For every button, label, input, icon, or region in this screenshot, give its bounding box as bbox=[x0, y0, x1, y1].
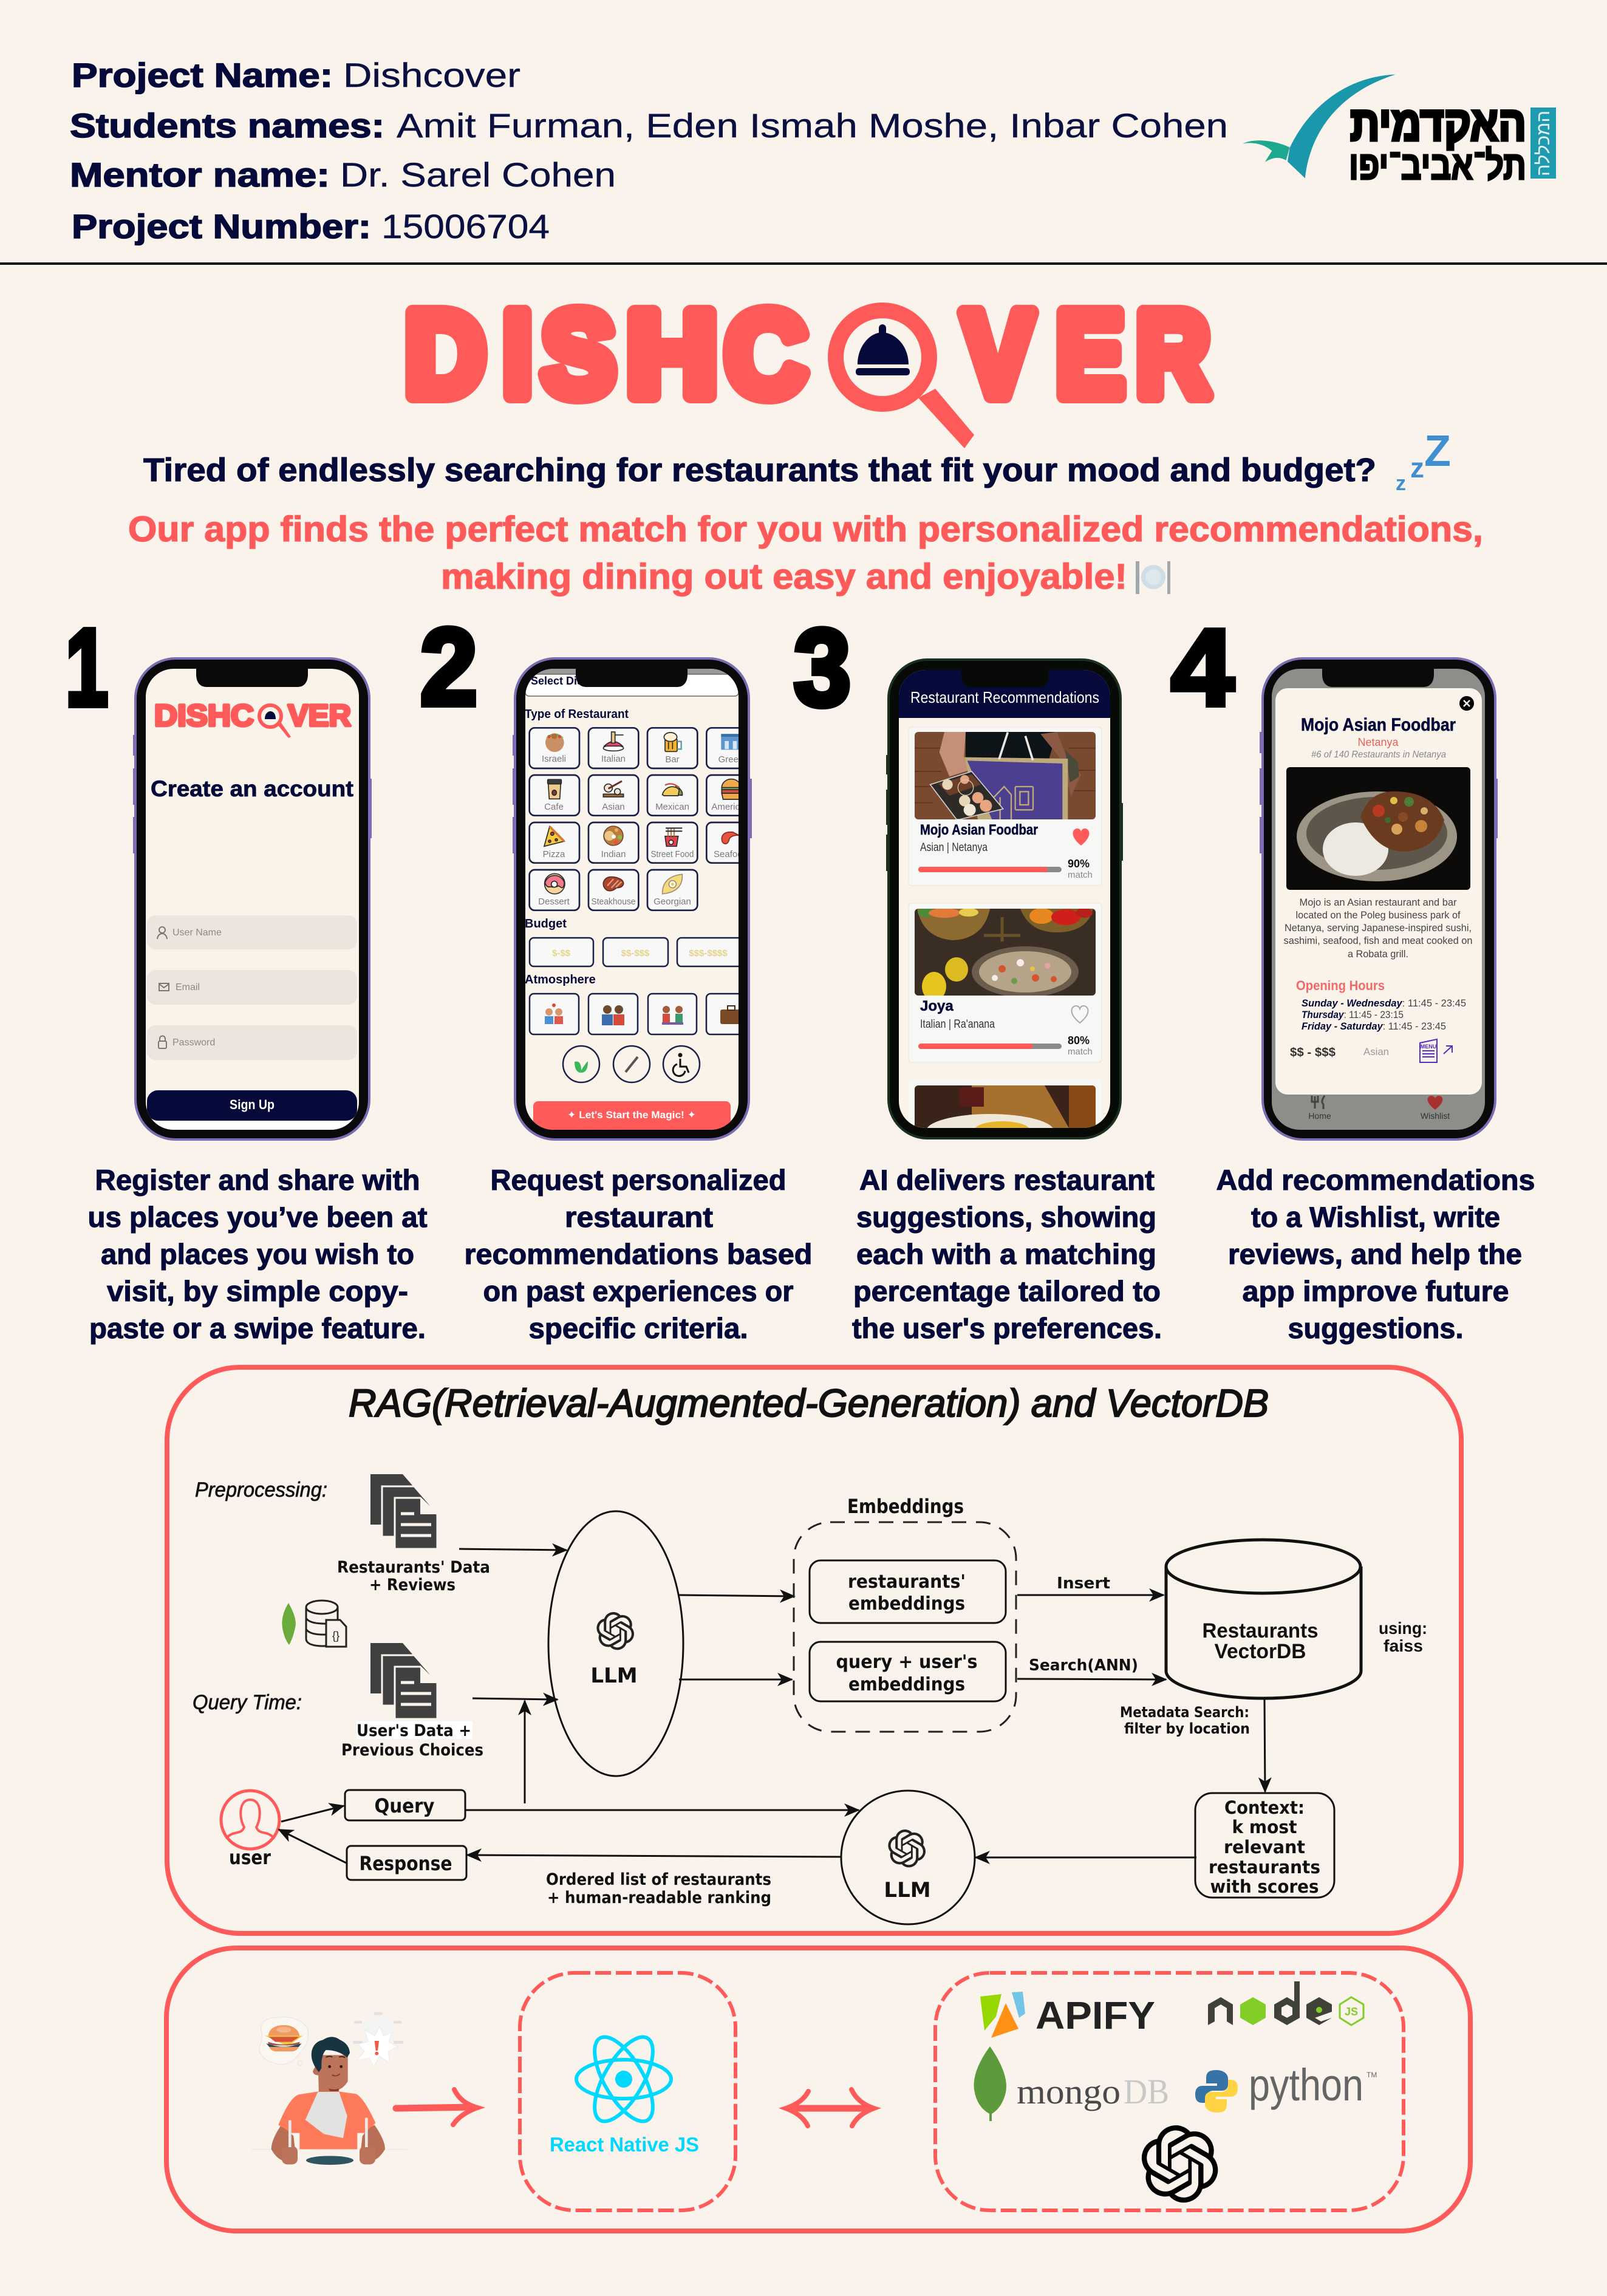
restaurant card: Mojo Asian Foodbar: 90% bbox=[1068, 858, 1090, 870]
illustration: hungry person bbox=[251, 2012, 407, 2165]
caption: step 2: specific criteria. bbox=[528, 1312, 748, 1344]
pot and alert burst bbox=[353, 2012, 403, 2067]
college logo: המכללה bbox=[1534, 111, 1554, 176]
card grid: restaurant types: Bar bbox=[665, 754, 680, 765]
tagline answer: making dining out easy and enjoyable! bbox=[441, 557, 1127, 596]
box: restaurants' embeddings bbox=[810, 1560, 1006, 1623]
arrow: search ANN: Search(ANN) bbox=[1029, 1656, 1138, 1675]
restaurant card: Mojo Asian Foodbar: Asian | Netanya bbox=[920, 841, 988, 854]
detail modal: Asian bbox=[1363, 1046, 1389, 1057]
arrow: context to LLM bbox=[975, 1856, 1196, 1859]
icon: MongoDB database: {} bbox=[332, 1630, 339, 1642]
opening hours: Thursday: 11:45 - 23:15 bbox=[1302, 1009, 1404, 1020]
food photo bbox=[1286, 767, 1470, 890]
students names line bbox=[70, 106, 1228, 145]
tagline answer: Our app finds the perfect match for you with personalized recommendations, bbox=[128, 510, 1483, 549]
restaurant card: Joya: Italian | Ra'anana bbox=[920, 1018, 995, 1031]
icon: steak bbox=[603, 877, 624, 891]
label: restaurants' data: Restaurants' Data bbox=[337, 1558, 490, 1577]
box: response: Response bbox=[360, 1852, 452, 1875]
context box bbox=[1195, 1793, 1334, 1898]
icon: MongoDB database bbox=[282, 1601, 346, 1647]
second LLM circle bbox=[841, 1791, 975, 1924]
budget options bbox=[530, 938, 742, 966]
label: metadata search: Metadata Search: bbox=[1120, 1704, 1249, 1721]
icon: beer mug bbox=[664, 733, 681, 751]
atmosphere options bbox=[530, 994, 756, 1034]
college logo: האקדמית bbox=[1350, 97, 1526, 151]
caption: step 3: the user's preferences. bbox=[852, 1312, 1162, 1344]
nav: wishlist: Wishlist bbox=[1421, 1111, 1450, 1121]
nav: wishlist bbox=[1421, 1096, 1450, 1121]
icon: pizza bbox=[544, 827, 564, 846]
project name line: Project Name: bbox=[72, 56, 333, 94]
logo: MongoDB: mongo bbox=[1017, 2072, 1121, 2111]
context box: relevant bbox=[1224, 1837, 1305, 1857]
panel: backend tools bbox=[935, 1973, 1404, 2210]
caption: step 1: Register and share with bbox=[95, 1164, 420, 1196]
arrows into and out of LLM bbox=[459, 1549, 794, 1803]
icon: restaurant documents bbox=[370, 1474, 437, 1549]
icon: React atom bbox=[576, 2028, 671, 2130]
card grid: restaurant types: American bbox=[711, 802, 750, 812]
caption: step 2: recommendations based bbox=[464, 1238, 813, 1270]
icon: OpenAI knot bbox=[888, 1830, 926, 1867]
nav: home bbox=[1308, 1096, 1331, 1121]
button: sign up bbox=[147, 1090, 357, 1121]
caption: step 4: suggestions. bbox=[1288, 1312, 1464, 1344]
heading: type of restaurant: Type of Restaurant bbox=[525, 708, 629, 721]
thought bubble with burger bbox=[259, 2017, 309, 2066]
field: user name: User Name bbox=[172, 928, 222, 938]
box: restaurants' embeddings: embeddings bbox=[848, 1593, 965, 1614]
label: user's data: User's Data + bbox=[357, 1721, 471, 1740]
caption: step 3: suggestions, showing bbox=[856, 1201, 1156, 1233]
card grid: restaurant types: Street Food bbox=[651, 849, 694, 859]
label: user's data: Previous Choices bbox=[341, 1741, 483, 1760]
opening hours: Sunday - Wednesday: 11:45 - 23:45 bbox=[1302, 997, 1466, 1009]
caption: step 2 bbox=[464, 1164, 813, 1344]
description: a Robata grill. bbox=[1348, 948, 1408, 960]
description: Mojo is an Asian restaurant and bar bbox=[1300, 897, 1457, 908]
opening hours bbox=[1296, 978, 1466, 1032]
card grid: restaurant types: Italian bbox=[601, 754, 626, 764]
field: user name bbox=[147, 915, 357, 949]
description: Netanya, serving Japanese-inspired sushi, bbox=[1285, 922, 1472, 934]
vector database cylinder: Restaurants bbox=[1203, 1619, 1318, 1642]
label: preprocessing: Preprocessing: bbox=[195, 1478, 327, 1502]
icon: khachapuri bbox=[663, 874, 682, 894]
app logo: Dishcover: R bbox=[1136, 287, 1210, 421]
card grid: restaurant types: Mexican bbox=[655, 802, 689, 812]
heading: create an account: Create an account bbox=[151, 776, 353, 801]
logo: MongoDB bbox=[974, 2046, 1169, 2121]
app logo: Dishcover: S bbox=[542, 287, 615, 421]
restaurant card: Joya: Joya bbox=[920, 998, 954, 1014]
students names line: Students names: bbox=[70, 106, 384, 145]
detail modal: #6 of 140 Restaurants in Netanya bbox=[1311, 750, 1446, 760]
label: using faiss: faiss bbox=[1384, 1636, 1423, 1655]
detail modal: Mojo Asian Foodbar bbox=[1301, 715, 1456, 735]
icon: pita bbox=[545, 733, 564, 752]
arrow: app to backend bbox=[786, 2089, 874, 2126]
logo: Apify bbox=[980, 1992, 1155, 2038]
card grid: restaurant types bbox=[530, 728, 757, 911]
icon: sushi bbox=[603, 781, 624, 797]
label: restaurants' data: + Reviews bbox=[369, 1576, 455, 1594]
budget options: $-$$ bbox=[552, 948, 571, 958]
context box: restaurants bbox=[1209, 1857, 1320, 1877]
caption: step 3 bbox=[852, 1164, 1162, 1344]
panel: React Native bbox=[520, 1973, 735, 2210]
description: located on the Poleg business park of bbox=[1296, 909, 1461, 921]
detail modal: Netanya bbox=[1357, 736, 1399, 748]
icon: donut bbox=[545, 873, 565, 894]
app logo: Dishcover: D bbox=[405, 287, 485, 421]
header: project details bbox=[70, 56, 1228, 245]
icon: shrimp bbox=[722, 832, 739, 844]
restaurant card: Mojo Asian Foodbar bbox=[909, 727, 1102, 886]
phone 3: recommendations screen bbox=[886, 660, 1123, 1148]
icon: thali bbox=[604, 826, 623, 846]
card grid: restaurant types: Israeli bbox=[542, 754, 566, 764]
caption: step 3: percentage tailored to bbox=[853, 1275, 1161, 1307]
header bar bbox=[899, 670, 1110, 718]
box: response bbox=[347, 1846, 466, 1880]
project name line bbox=[72, 56, 520, 94]
caption: step 1: and places you wish to bbox=[101, 1238, 414, 1270]
icon: menu bbox=[1420, 1039, 1452, 1062]
students names line: Amit Furman, Eden Ismah Moshe, Inbar Cohen bbox=[397, 106, 1228, 145]
logo: OpenAI bbox=[1142, 2125, 1218, 2202]
icon: taverna building bbox=[721, 734, 739, 750]
logo: Apify: APIFY bbox=[1036, 1994, 1155, 2037]
icon: plate and cutlery bbox=[1136, 561, 1170, 594]
caption: step 2: restaurant bbox=[565, 1201, 713, 1233]
label: user's data bbox=[341, 1721, 483, 1760]
icon: sleeping zzz: z bbox=[1410, 452, 1424, 483]
card grid: restaurant types: Seafood bbox=[714, 849, 748, 859]
caption: step 4: app improve future bbox=[1243, 1275, 1509, 1307]
button: let's start the magic: ✦ Let's Start the Magic! ✦ bbox=[567, 1109, 696, 1121]
description bbox=[1284, 897, 1472, 960]
app logo: Dishcover bbox=[405, 287, 1210, 448]
mentor name line: Mentor name: bbox=[70, 155, 330, 194]
icon: user bbox=[221, 1791, 279, 1869]
mentor name line bbox=[70, 155, 616, 194]
icon: sleeping zzz: Z bbox=[1424, 427, 1451, 476]
app logo: Dishcover: C bbox=[725, 287, 807, 421]
icon: sleeping zzz: z bbox=[1396, 472, 1406, 495]
step number 1: 1 bbox=[66, 607, 108, 729]
caption: step 4: to a Wishlist, write bbox=[1251, 1201, 1500, 1233]
detail modal: $$ - $$$ bbox=[1290, 1046, 1336, 1059]
label: embeddings: Embeddings bbox=[847, 1495, 964, 1518]
app logo: Dishcover: I bbox=[503, 287, 532, 421]
mini logo bbox=[155, 703, 352, 738]
field: password bbox=[147, 1025, 357, 1060]
arrow: insert: Insert bbox=[1057, 1574, 1110, 1593]
card grid: restaurant types: Pizza bbox=[543, 849, 565, 859]
opening hours: Friday - Saturday: 11:45 - 23:45 bbox=[1302, 1020, 1446, 1032]
logo: Python bbox=[1195, 2060, 1377, 2113]
caption: step 4: reviews, and help the bbox=[1228, 1238, 1522, 1270]
icon: noodle box bbox=[665, 828, 682, 846]
budget options: $$$-$$$$ bbox=[689, 948, 728, 958]
restaurant card: third bbox=[909, 1079, 1102, 1148]
second LLM circle: LLM bbox=[884, 1878, 931, 1902]
phone 2: preference selection screen bbox=[513, 658, 757, 1139]
context box: Context: bbox=[1224, 1797, 1305, 1818]
label: using faiss: using: bbox=[1379, 1619, 1427, 1638]
college logo bbox=[1243, 75, 1556, 188]
card grid: restaurant types: Greek bbox=[718, 754, 743, 765]
label: metadata search bbox=[1120, 1704, 1250, 1737]
restaurant card: Mojo Asian Foodbar: Mojo Asian Foodbar bbox=[920, 822, 1038, 838]
detail modal bbox=[1275, 688, 1482, 1095]
caption: step 1: us places you’ve been at bbox=[87, 1201, 428, 1233]
box: query + user's embeddings bbox=[810, 1642, 1006, 1701]
tagline answer bbox=[128, 510, 1483, 596]
step number 4: 4 bbox=[1171, 607, 1234, 729]
restaurant card: Joya bbox=[909, 903, 1102, 1062]
logo: Node.js: JS bbox=[1345, 2006, 1358, 2018]
phone 2: preference selection screen: Select Dishes bbox=[531, 675, 602, 687]
restaurant card: Joya: match bbox=[1068, 1047, 1093, 1057]
app logo: Dishcover: E bbox=[1056, 287, 1124, 421]
card grid: restaurant types: Georgian bbox=[653, 897, 691, 907]
LLM ellipse bbox=[548, 1511, 683, 1776]
card grid: restaurant types: Dessert bbox=[538, 897, 570, 907]
box: query + user's embeddings: query + user's bbox=[836, 1652, 978, 1673]
arrow: user to app bbox=[396, 2089, 477, 2125]
caption: step 1: visit, by simple copy- bbox=[107, 1275, 408, 1307]
description: sashimi, seafood, fish and meat cooked on bbox=[1284, 935, 1472, 946]
caption: step 4 bbox=[1216, 1164, 1535, 1344]
vector database cylinder bbox=[1166, 1540, 1361, 1698]
embeddings dashed group bbox=[794, 1522, 1016, 1732]
person bbox=[251, 2037, 407, 2165]
context box: with scores bbox=[1210, 1876, 1319, 1897]
heading: budget: Budget bbox=[525, 917, 567, 931]
box: query + user's embeddings: embeddings bbox=[848, 1674, 965, 1695]
project name line: Dishcover bbox=[343, 56, 520, 94]
restaurant card: Mojo Asian Foodbar: match bbox=[1068, 870, 1093, 880]
college logo: תל־אביב־יפו bbox=[1349, 143, 1526, 188]
icon: user documents bbox=[370, 1643, 437, 1719]
icon: menu: MENU bbox=[1421, 1044, 1436, 1050]
phone 1: sign up screen bbox=[133, 658, 372, 1139]
label: ordered list: + human-readable ranking bbox=[547, 1888, 771, 1907]
caption: step 2: on past experiences or bbox=[483, 1275, 793, 1307]
label: React Native JS: React Native JS bbox=[550, 2133, 699, 2156]
project number line bbox=[72, 207, 550, 245]
logo: MongoDB: DB bbox=[1124, 2072, 1169, 2111]
button: sign up: Sign Up bbox=[230, 1097, 275, 1112]
LLM ellipse: LLM bbox=[590, 1664, 638, 1688]
label: metadata search: filter by location bbox=[1124, 1720, 1250, 1737]
tagline question: Tired of endlessly searching for restaurants that fit your mood and budget? bbox=[143, 452, 1376, 488]
caption: step 3: AI delivers restaurant bbox=[859, 1164, 1155, 1196]
label: query time: Query Time: bbox=[193, 1691, 302, 1714]
context box: k most bbox=[1232, 1817, 1297, 1837]
budget options: $$-$$$ bbox=[621, 948, 650, 958]
vector database cylinder: VectorDB bbox=[1215, 1640, 1306, 1663]
field: email bbox=[147, 970, 357, 1005]
card grid: restaurant types: Asian bbox=[602, 802, 625, 812]
button: let's start the magic bbox=[533, 1101, 731, 1138]
app logo: Dishcover: V bbox=[963, 287, 1033, 421]
dietary and accessibility toggles bbox=[563, 1046, 700, 1082]
heading: atmosphere: Atmosphere bbox=[525, 973, 596, 986]
panel: tech stack bbox=[166, 1948, 1470, 2231]
caption: step 1 bbox=[87, 1164, 428, 1344]
nav: home: Home bbox=[1308, 1111, 1331, 1121]
icon: user: user bbox=[229, 1846, 271, 1869]
icon: pasta bbox=[603, 732, 624, 751]
logo: Python: python bbox=[1249, 2060, 1363, 2110]
logo: Node.js bbox=[1208, 1981, 1363, 2025]
card grid: restaurant types: Steakhouse bbox=[592, 897, 635, 907]
label: using faiss bbox=[1379, 1619, 1427, 1655]
header bar: Restaurant Recommendations bbox=[910, 688, 1099, 706]
field: password: Password bbox=[172, 1037, 215, 1048]
icon: OpenAI knot bbox=[596, 1612, 634, 1650]
arrows: user flow bbox=[279, 1806, 859, 1863]
caption: step 3: each with a matching bbox=[856, 1238, 1156, 1270]
panel: RAG architecture diagram bbox=[167, 1367, 1461, 1933]
card grid: restaurant types: Cafe bbox=[544, 802, 564, 812]
mentor name line: Dr. Sarel Cohen bbox=[340, 155, 616, 194]
project number line: 15006704 bbox=[381, 207, 550, 245]
icon: taco bbox=[663, 784, 683, 796]
icon: sleeping zzz bbox=[1396, 427, 1451, 495]
icon: burger bbox=[722, 779, 741, 799]
opening hours: Opening Hours bbox=[1296, 978, 1385, 993]
caption: step 1: paste or a swipe feature. bbox=[89, 1312, 426, 1344]
logo: Python: TM bbox=[1366, 2071, 1377, 2079]
box: restaurants' embeddings: restaurants' bbox=[848, 1571, 966, 1593]
label: ordered list bbox=[546, 1870, 771, 1907]
icon: coffee cup bbox=[548, 779, 561, 799]
step number 2: 2 bbox=[420, 606, 477, 728]
label: restaurants' data bbox=[337, 1558, 490, 1594]
app logo: Dishcover: H bbox=[627, 287, 717, 421]
mini logo: DISHC bbox=[154, 699, 254, 733]
phone 4: restaurant detail screen bbox=[1260, 658, 1498, 1139]
mini logo: VER bbox=[288, 699, 351, 733]
restaurant card: Joya: 80% bbox=[1068, 1034, 1090, 1047]
arrow: vector db to context bbox=[1264, 1698, 1265, 1792]
header divider bbox=[0, 262, 1607, 265]
field: email: Email bbox=[176, 982, 200, 993]
step number 3: 3 bbox=[794, 607, 851, 729]
project number line: Project Number: bbox=[72, 207, 371, 245]
caption: step 2: Request personalized bbox=[491, 1164, 786, 1196]
RAG title: RAG(Retrieval-Augmented-Generation) and VectorDB bbox=[349, 1381, 1269, 1425]
box: query bbox=[345, 1790, 465, 1820]
caption: step 4: Add recommendations bbox=[1216, 1164, 1535, 1196]
box: query: Query bbox=[374, 1794, 435, 1817]
card grid: restaurant types: Indian bbox=[601, 849, 626, 859]
label: ordered list: Ordered list of restaurants bbox=[546, 1870, 771, 1889]
